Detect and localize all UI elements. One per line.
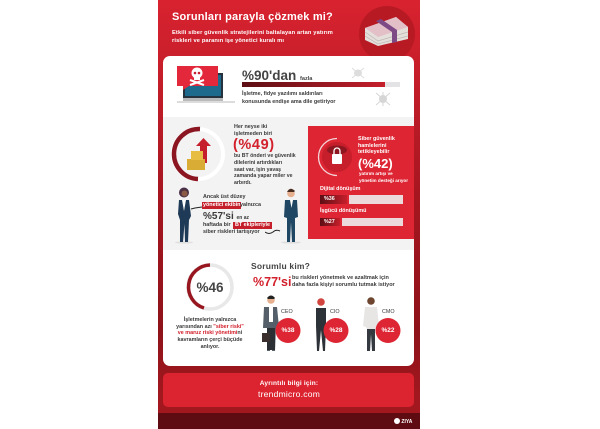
cyber risk note xyxy=(359,171,408,183)
donut chart: 49 percent xyxy=(171,126,225,182)
heading: responsibility: Sorumlu kim? xyxy=(251,261,310,271)
46 percent description xyxy=(176,316,244,350)
budget description: saat var, işin yavaş xyxy=(234,166,281,172)
panel: ransom card xyxy=(163,56,414,117)
panel: footer call to action xyxy=(163,373,414,407)
budget description: zamanda yapar miler ve xyxy=(234,173,293,179)
role: CIO xyxy=(316,298,348,351)
46 percent description: yarısından azı "siber riski" xyxy=(176,324,244,330)
panel: survey section xyxy=(163,117,414,250)
logo: ZIYA xyxy=(401,419,412,425)
executives text block xyxy=(202,194,272,235)
cyber risk note: yönetim desteği arıyor xyxy=(359,178,408,182)
ransom description xyxy=(242,90,336,105)
illustration: CEO man xyxy=(262,296,278,351)
illustration: woman xyxy=(175,188,202,244)
46 percent description: ve maruz riski yönetimini xyxy=(178,330,242,336)
panel: responsibility xyxy=(163,250,414,366)
CIO label: CIO xyxy=(330,309,340,315)
intro text: riskleri ve paranın işe yönetici kuralı mı xyxy=(172,38,284,44)
budget intro xyxy=(234,124,272,137)
46 percent description: kavramların çerçi büçüde xyxy=(177,337,243,343)
intro text xyxy=(172,30,333,44)
ransom description: konusunda endişe ama dile getiriyor xyxy=(242,99,335,105)
bar fill xyxy=(242,82,385,87)
logo xyxy=(394,418,412,425)
CEO badge xyxy=(276,318,300,342)
icon: bugs xyxy=(352,68,390,106)
ransom progress bar xyxy=(242,82,400,87)
77 percent description: bu riskleri yönetmek ve azaltmak için xyxy=(292,275,389,281)
cyber risk intro: tetikleyebilir xyxy=(358,149,389,155)
bar: 36 percent xyxy=(320,195,403,204)
46 percent description: anlıyor. xyxy=(201,344,219,350)
footer bar xyxy=(158,413,420,429)
illustration: CMO man xyxy=(363,297,378,351)
CMO label: CMO xyxy=(382,309,395,315)
CEO label: CEO xyxy=(281,309,293,315)
77 percent stat: %77'si xyxy=(253,275,291,289)
cyber risk intro: Siber güvenlik xyxy=(358,136,395,142)
ransom statistic: %90'dan fazla xyxy=(242,68,312,83)
bar value xyxy=(320,195,349,204)
bar value xyxy=(320,218,342,226)
call to action label: Ayrıntılı bilgi için: xyxy=(260,380,318,387)
CMO badge: %22 xyxy=(381,326,394,334)
icon: money stack xyxy=(359,6,415,56)
budget description: arbırdı. xyxy=(234,180,252,186)
CMO badge xyxy=(376,318,400,342)
CIO badge xyxy=(324,318,348,342)
executives line 1: Ancak üst düzey xyxy=(203,194,246,200)
budget description xyxy=(234,153,296,186)
cyber risk intro xyxy=(358,136,395,155)
cyber risk intro: hamlelerini xyxy=(358,143,386,149)
illustration: man xyxy=(265,188,301,244)
49 percent stat: (%49) xyxy=(233,137,275,153)
ransom description: İşletme, fidye yazılımı saldırıları xyxy=(242,91,323,97)
call to action link: trendmicro.com xyxy=(258,389,320,399)
budget description: bu BT önderi ve güvenlik xyxy=(234,153,296,159)
bar value: %36 xyxy=(324,196,335,202)
budget intro: Her neyse iki xyxy=(234,124,267,130)
77 percent description xyxy=(292,275,395,288)
bar value: %27 xyxy=(324,219,335,225)
icon: laptop with skull alert xyxy=(177,66,235,103)
42 percent stat: (%42) xyxy=(358,156,393,171)
77 percent description: daha fazla kişiyi sorumlu tutmak istiyor xyxy=(292,282,395,288)
57 percent stat: %57'si en az xyxy=(203,211,249,222)
cyber risk note: yatırım artışı ve xyxy=(359,171,393,176)
bar: 27 percent xyxy=(320,218,403,226)
red page background xyxy=(158,0,420,429)
role: CMO xyxy=(363,297,400,351)
executives line 3: haftada bir xyxy=(203,222,231,228)
46 percent label: %46 xyxy=(196,280,224,295)
label: işgücü: İşgücü dönüşümü xyxy=(320,208,366,214)
panel: cyber risk xyxy=(308,126,414,239)
budget intro: işletmeden biri xyxy=(234,131,272,137)
title: Sorunları parayla çözmek mi? xyxy=(172,11,333,23)
illustration: CIO woman xyxy=(316,298,326,351)
executives line 4: siber riskleri tartışıyor xyxy=(203,229,260,235)
46 percent description: İşletmelerin yalnızca xyxy=(184,317,236,323)
budget description: dilelerini artırdıkları xyxy=(234,160,282,166)
donut chart: 46 percent xyxy=(186,263,234,311)
highlight: yönetici: yönetici ekibin xyxy=(203,202,240,208)
budget text block xyxy=(233,124,296,186)
intro text: Etkili siber güvenlik stratejilerini baltalayan artan yatırım xyxy=(172,30,333,36)
CEO badge: %38 xyxy=(281,326,294,334)
icon: cloud lock ring xyxy=(318,138,352,176)
CIO badge: %28 xyxy=(329,326,342,334)
role: CEO xyxy=(262,296,300,351)
label: dijital dönüşüm: Dijital dönüşüm xyxy=(320,186,360,192)
executives line 2: yalnızca xyxy=(240,202,261,208)
highlight: BT ekipleriyle: BT ekipleriyle xyxy=(235,222,270,228)
